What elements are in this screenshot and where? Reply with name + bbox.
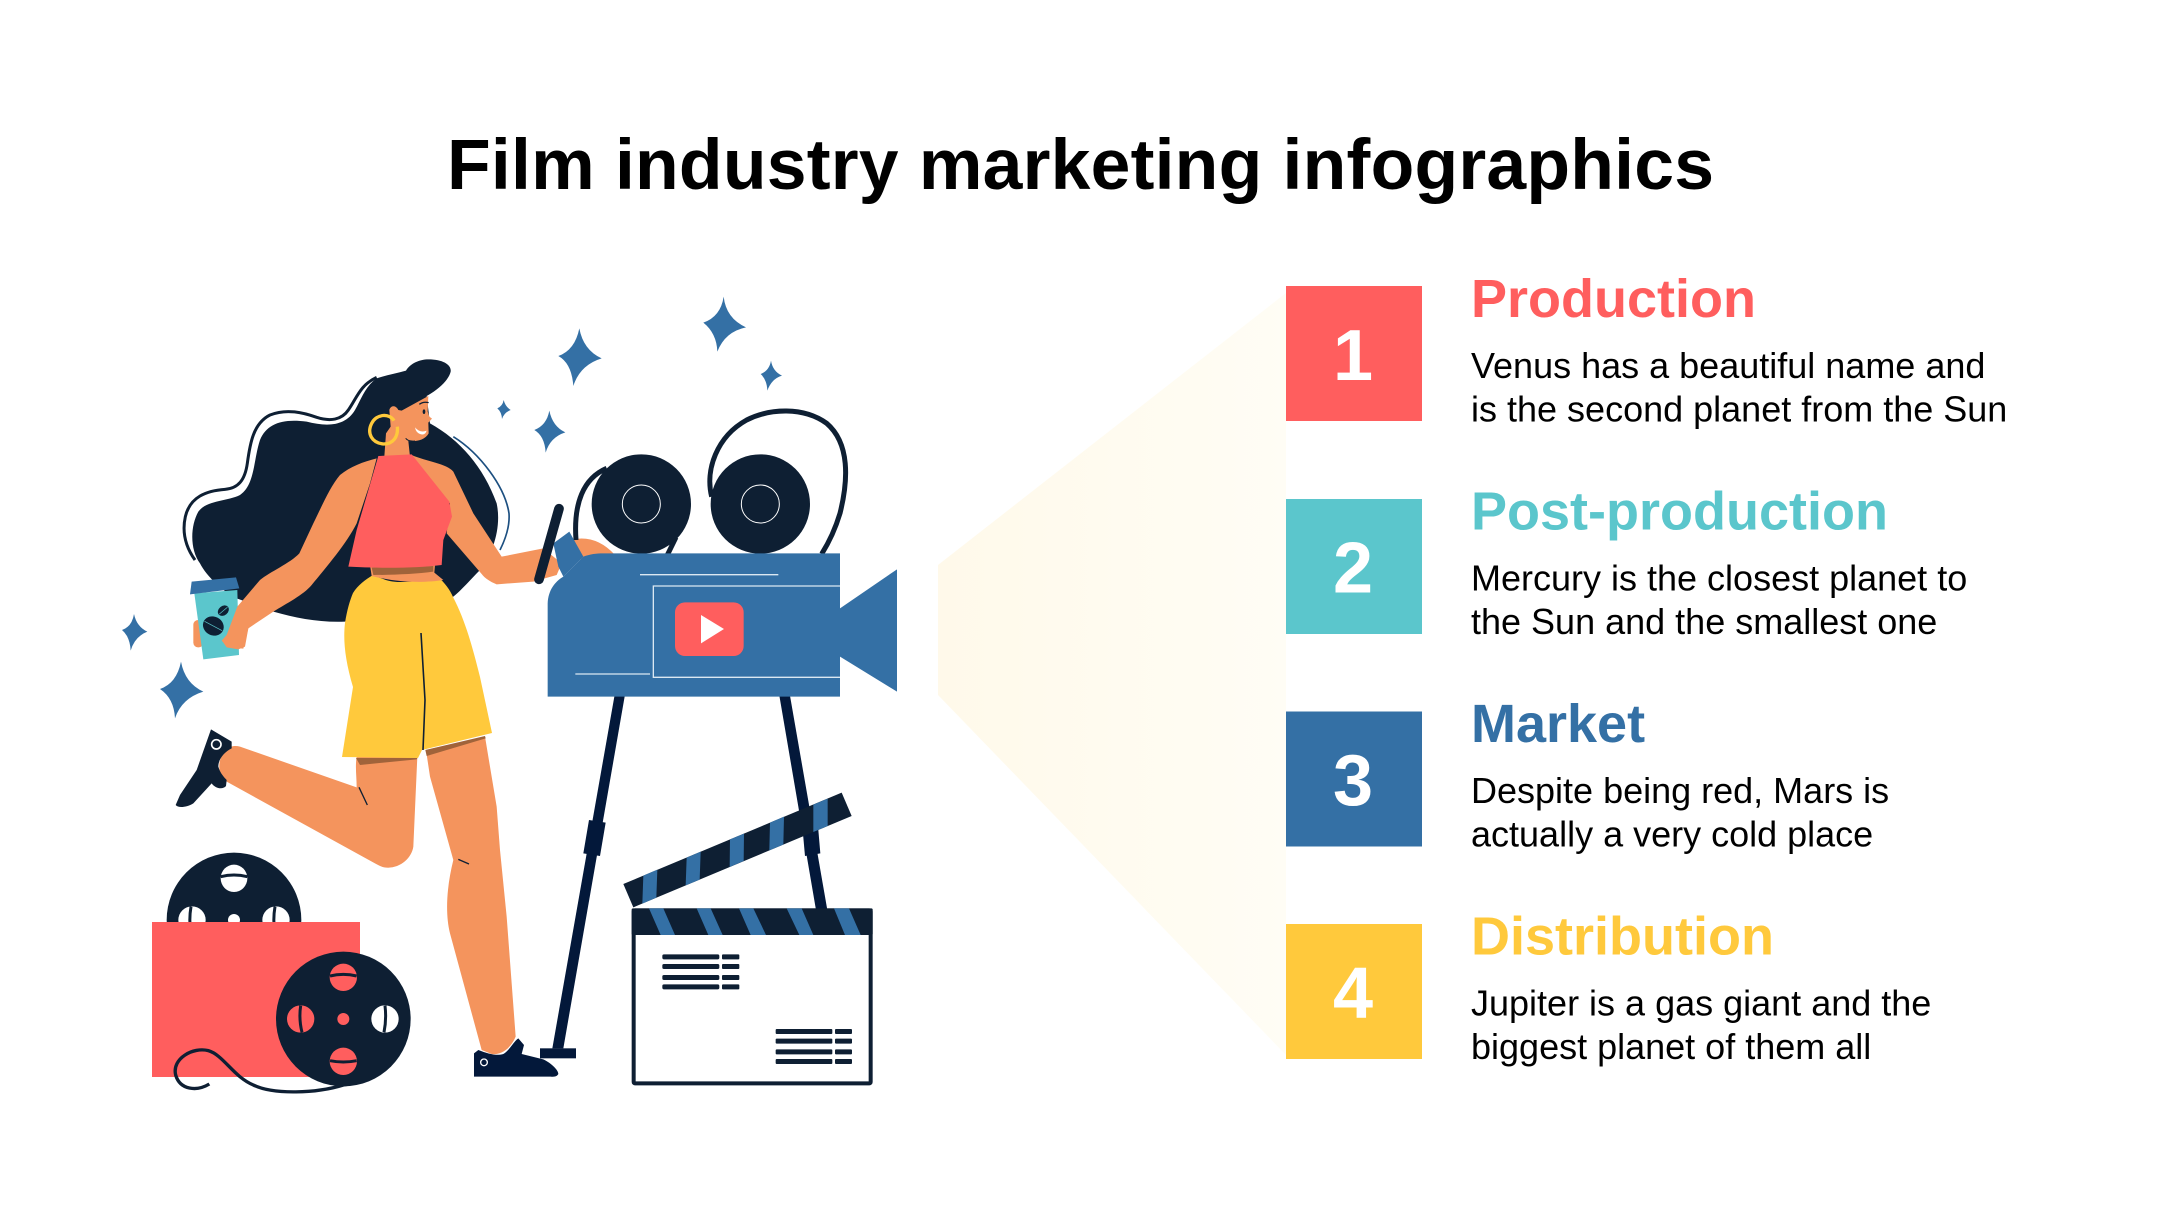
torso, arms and head bbox=[222, 396, 562, 649]
red box bbox=[152, 922, 360, 1077]
legs bbox=[219, 736, 516, 1054]
item 1: production: 1 bbox=[1333, 316, 1373, 396]
item 2: post-production bbox=[1286, 482, 1967, 642]
item 3: market bbox=[1286, 694, 1889, 854]
illustration: film maker with camera bbox=[122, 297, 897, 1092]
camera body bbox=[548, 532, 897, 697]
item 2: post-production: Mercury is the closest planet to bbox=[1471, 558, 1967, 598]
clapperboard bbox=[623, 793, 873, 1083]
icon: play button bbox=[675, 602, 744, 656]
film reel with strip bbox=[175, 952, 411, 1092]
item 3: market: 3 bbox=[1333, 741, 1373, 821]
item 4: distribution: Distribution bbox=[1471, 906, 1774, 966]
item 1: production bbox=[1286, 269, 2007, 430]
hair bbox=[184, 359, 509, 622]
coffee cup bbox=[190, 577, 239, 659]
item 1: production: Production bbox=[1471, 269, 1756, 329]
camera film loops bbox=[576, 411, 846, 555]
projector light beam bbox=[938, 293, 1286, 1055]
camera reels bbox=[592, 454, 810, 554]
item 3: market: actually a very cold place bbox=[1471, 814, 1873, 854]
icon: sparkle stars bbox=[122, 297, 782, 718]
shorts pleat bbox=[421, 633, 425, 750]
item 4: distribution: 4 bbox=[1333, 954, 1373, 1034]
reel behind box bbox=[167, 853, 301, 987]
item 4: distribution: biggest planet of them all bbox=[1471, 1026, 1871, 1067]
item 2: post-production: the Sun and the smallest one bbox=[1471, 601, 1937, 642]
item 1: production: is the second planet from the Sun bbox=[1471, 388, 2007, 430]
item 2: post-production: 2 bbox=[1333, 528, 1373, 608]
title: Film industry marketing infographics bbox=[447, 125, 1714, 205]
yellow shorts bbox=[342, 575, 492, 758]
hand on coffee cup bbox=[222, 628, 248, 649]
shoes bbox=[176, 729, 558, 1077]
item 4: distribution: Jupiter is a gas giant and the bbox=[1471, 982, 1931, 1024]
item 3: market: Market bbox=[1471, 694, 1645, 754]
item 1: production: Venus has a beautiful name and bbox=[1471, 345, 1985, 386]
item 3: market: Despite being red, Mars is bbox=[1471, 770, 1889, 811]
item 2: post-production: Post-production bbox=[1471, 482, 1888, 542]
item 4: distribution bbox=[1286, 906, 1931, 1067]
hand behind camera bbox=[573, 539, 615, 560]
tripod bbox=[540, 690, 827, 1058]
handle pole bbox=[539, 509, 559, 579]
